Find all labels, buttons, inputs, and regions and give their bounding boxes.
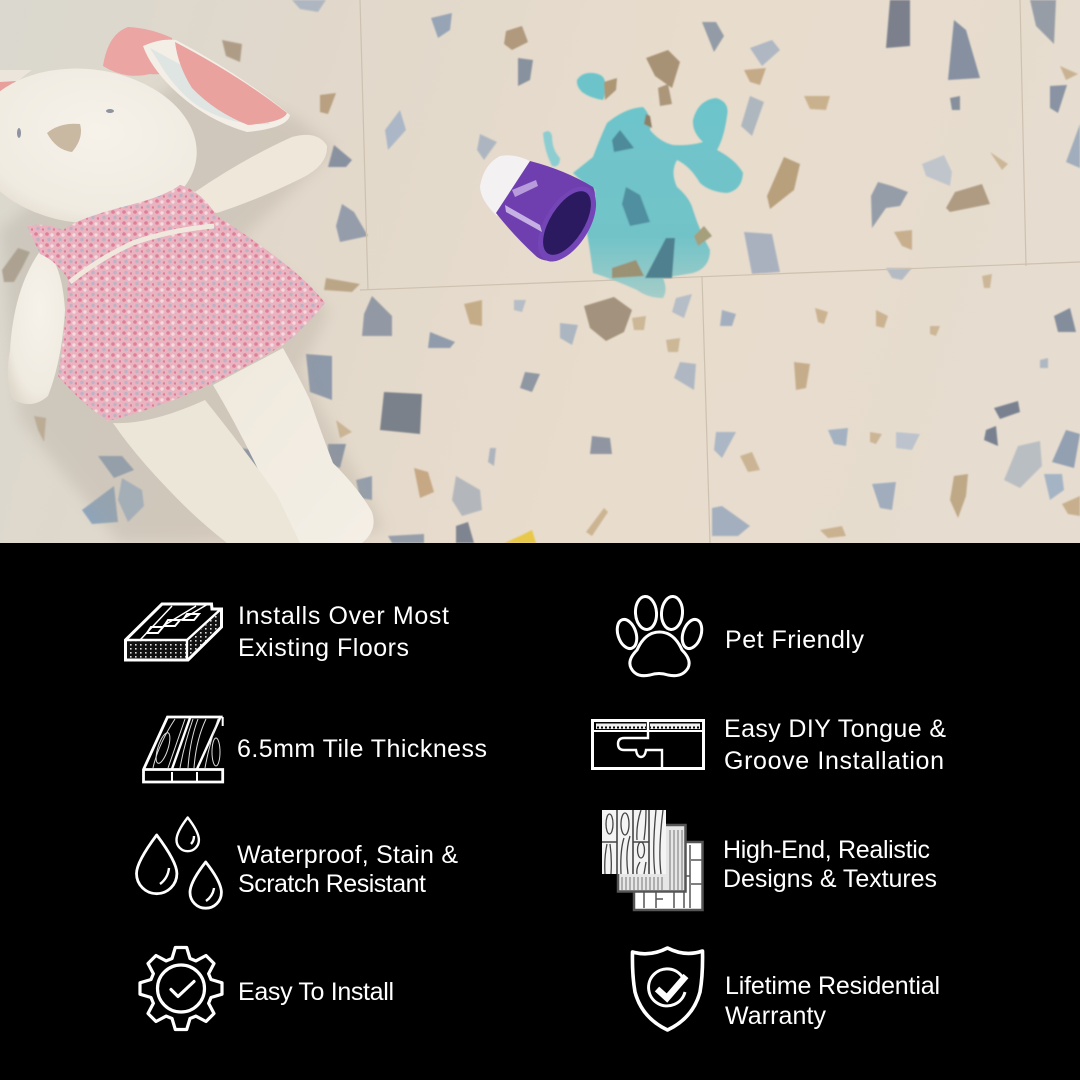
black background (0, 543, 1080, 1080)
sample: fine grain tile (618, 825, 686, 892)
feature: lifetime residential warranty (632, 948, 940, 1030)
terrazzo floor background (0, 0, 1080, 543)
photo panel: terrazzo floor with plush bunny and spill (0, 0, 1080, 543)
feature text: Lifetime Residential (725, 972, 940, 1000)
feature text: 6.5mm Tile Thickness (237, 735, 487, 763)
feature text: Easy To Install (238, 978, 394, 1006)
icon: paw print (614, 596, 705, 676)
feature text: Warranty (725, 1002, 826, 1030)
sample: brick tile (634, 842, 702, 910)
plush bunny toy (0, 27, 385, 543)
feature: easy to install (140, 948, 394, 1030)
icon: shield with check mark (632, 948, 703, 1030)
bunny head (0, 58, 204, 234)
feature text: Designs & Textures (723, 865, 937, 893)
feature text (237, 841, 458, 898)
bunny left arm (8, 247, 65, 404)
feature: pet friendly (614, 596, 864, 676)
bunny eyes (17, 109, 114, 138)
bunny ear, large (103, 27, 290, 132)
spill: turquoise liquid (543, 73, 743, 298)
feature text (724, 715, 946, 775)
feature text: Pet Friendly (725, 626, 864, 654)
bunny left leg (113, 400, 300, 543)
feature text: Scratch Resistant (238, 870, 426, 898)
feature: high-end realistic designs and textures (602, 810, 937, 910)
icon: wood plank with thickness edge (144, 717, 223, 782)
terrazzo chips (2, 0, 1080, 543)
feature text: Easy DIY Tongue & (724, 715, 946, 743)
feature text (238, 602, 449, 662)
icon: stacked material samples (602, 810, 702, 910)
icon: layered floor planks (126, 604, 222, 660)
feature: 6.5mm tile thickness (144, 717, 487, 782)
feature text: Waterproof, Stain & (237, 841, 458, 869)
feature: waterproof, stain and scratch resistant (136, 818, 458, 908)
feature text: Groove Installation (724, 747, 944, 775)
feature text: High-End, Realistic (723, 836, 930, 864)
bunny ear inner (0, 81, 16, 110)
feature text: Existing Floors (238, 634, 409, 662)
icon: gear with check mark (140, 948, 222, 1030)
feature text (723, 836, 937, 893)
sample: wood grain tile (602, 810, 666, 874)
features panel (0, 543, 1080, 1080)
feature: installs over most existing floors (126, 602, 449, 662)
icon: tongue and groove joint (592, 720, 704, 768)
feature text: Installs Over Most (238, 602, 449, 630)
icon: three water drops (136, 818, 221, 908)
bunny right leg (213, 348, 374, 543)
bunny ear, small (0, 70, 32, 112)
bunny soft shadow (0, 70, 385, 543)
bunny right arm (195, 135, 327, 213)
bunny pink floral dress (27, 185, 325, 421)
feature: easy DIY tongue and groove installation (592, 715, 946, 775)
feature text (725, 972, 940, 1030)
dress lace waistband (70, 226, 214, 282)
tile seams (360, 0, 1080, 543)
bunny nose (47, 124, 81, 152)
cup: purple and white tumbler (480, 155, 608, 271)
